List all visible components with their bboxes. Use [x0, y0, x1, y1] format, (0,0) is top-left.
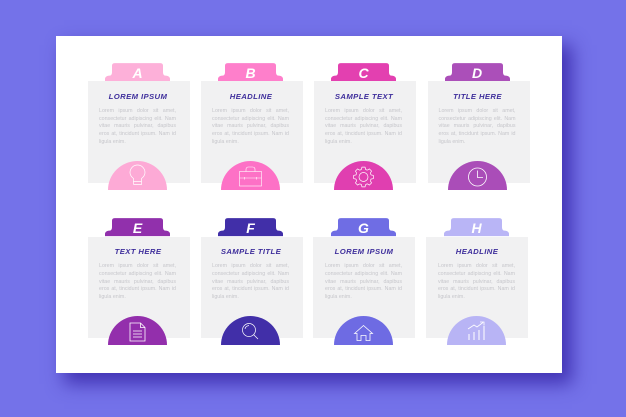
icon: briefcase	[221, 161, 280, 190]
text A: ligula enim.	[99, 139, 126, 145]
text E: eros at, tincidunt ipsum. Nam id	[99, 286, 176, 292]
tab F	[218, 218, 283, 236]
card H	[426, 218, 528, 345]
text B	[212, 108, 289, 145]
text C: Lorem ipsum dolor sit amet,	[325, 108, 402, 114]
text C	[325, 108, 402, 145]
text E: vitae mauris pulvinar, dapibus	[99, 279, 176, 285]
title A: LOREM IPSUM	[109, 92, 167, 101]
text D: vitae mauris pulvinar, dapibus	[438, 123, 516, 129]
icon: growth chart	[447, 316, 506, 345]
icon: document	[108, 316, 167, 345]
icon: house	[334, 316, 393, 345]
icon: light bulb	[108, 161, 167, 190]
title E: TEXT HERE	[115, 247, 161, 256]
card C	[314, 63, 416, 190]
text C: vitae mauris pulvinar, dapibus	[325, 123, 402, 129]
text B: eros at, tincidunt ipsum. Nam id	[212, 131, 289, 137]
text G: ligula enim.	[325, 294, 352, 300]
text G: vitae mauris pulvinar, dapibus	[325, 279, 402, 285]
text A: consectetur adipiscing elit. Nam	[99, 116, 176, 122]
text F: Lorem ipsum dolor sit amet,	[212, 263, 289, 269]
text E: ligula enim.	[99, 294, 126, 300]
text E: consectetur adipiscing elit. Nam	[99, 271, 176, 277]
card A	[88, 63, 190, 190]
text A	[99, 108, 176, 145]
text B: Lorem ipsum dolor sit amet,	[212, 108, 289, 114]
text F	[212, 263, 289, 300]
tab E	[105, 218, 170, 236]
text C: ligula enim.	[325, 139, 352, 145]
title H: HEADLINE	[456, 247, 498, 256]
letter A: A	[132, 65, 143, 81]
text H: eros at, tincidunt ipsum. Nam id	[438, 286, 515, 292]
title G: LOREM IPSUM	[335, 247, 393, 256]
text H	[438, 263, 515, 300]
title C: SAMPLE TEXT	[335, 92, 393, 101]
title F: SAMPLE TITLE	[221, 247, 281, 256]
tab B	[218, 63, 283, 81]
text F: ligula enim.	[212, 294, 239, 300]
text D: consectetur adipiscing elit. Nam	[438, 116, 516, 122]
text G: Lorem ipsum dolor sit amet,	[325, 263, 402, 269]
tab A	[105, 63, 170, 81]
text B: ligula enim.	[212, 139, 239, 145]
title B: HEADLINE	[230, 92, 272, 101]
card G	[313, 218, 415, 345]
text B: vitae mauris pulvinar, dapibus	[212, 123, 289, 129]
text E: Lorem ipsum dolor sit amet,	[99, 263, 176, 269]
text D	[438, 108, 516, 145]
letter H: H	[471, 220, 482, 236]
tab G	[331, 218, 396, 236]
text E	[99, 263, 176, 300]
text A: vitae mauris pulvinar, dapibus	[99, 123, 176, 129]
text D: ligula enim.	[438, 139, 465, 145]
text G: consectetur adipiscing elit. Nam	[325, 271, 402, 277]
letter G: G	[358, 220, 369, 236]
text C: consectetur adipiscing elit. Nam	[325, 116, 402, 122]
text A: Lorem ipsum dolor sit amet,	[99, 108, 176, 114]
text H: consectetur adipiscing elit. Nam	[438, 271, 515, 277]
text F: eros at, tincidunt ipsum. Nam id	[212, 286, 289, 292]
card F	[201, 218, 303, 345]
text C: eros at, tincidunt ipsum. Nam id	[325, 131, 402, 137]
text D: eros at, tincidunt ipsum. Nam id	[438, 131, 516, 137]
text D: Lorem ipsum dolor sit amet,	[438, 108, 516, 114]
letter D: D	[472, 65, 482, 81]
icon: magnifying glass	[221, 316, 280, 345]
text G	[325, 263, 402, 300]
letter B: B	[245, 65, 256, 81]
icon: gear	[334, 161, 393, 190]
text H: ligula enim.	[438, 294, 465, 300]
title D: TITLE HERE	[453, 92, 502, 101]
card B	[201, 63, 303, 190]
letter C: C	[358, 65, 369, 81]
icon: clock	[448, 161, 507, 190]
white panel	[56, 36, 562, 373]
text H: vitae mauris pulvinar, dapibus	[438, 279, 515, 285]
tab C	[331, 63, 396, 81]
text A: eros at, tincidunt ipsum. Nam id	[99, 131, 176, 137]
letter F: F	[246, 220, 255, 236]
text F: consectetur adipiscing elit. Nam	[212, 271, 289, 277]
text F: vitae mauris pulvinar, dapibus	[212, 279, 289, 285]
text B: consectetur adipiscing elit. Nam	[212, 116, 289, 122]
text H: Lorem ipsum dolor sit amet,	[438, 263, 515, 269]
tab D	[445, 63, 510, 81]
card E	[88, 218, 190, 345]
card D	[428, 63, 530, 190]
letter E: E	[133, 220, 142, 236]
tab H	[444, 218, 509, 236]
text G: eros at, tincidunt ipsum. Nam id	[325, 286, 402, 292]
